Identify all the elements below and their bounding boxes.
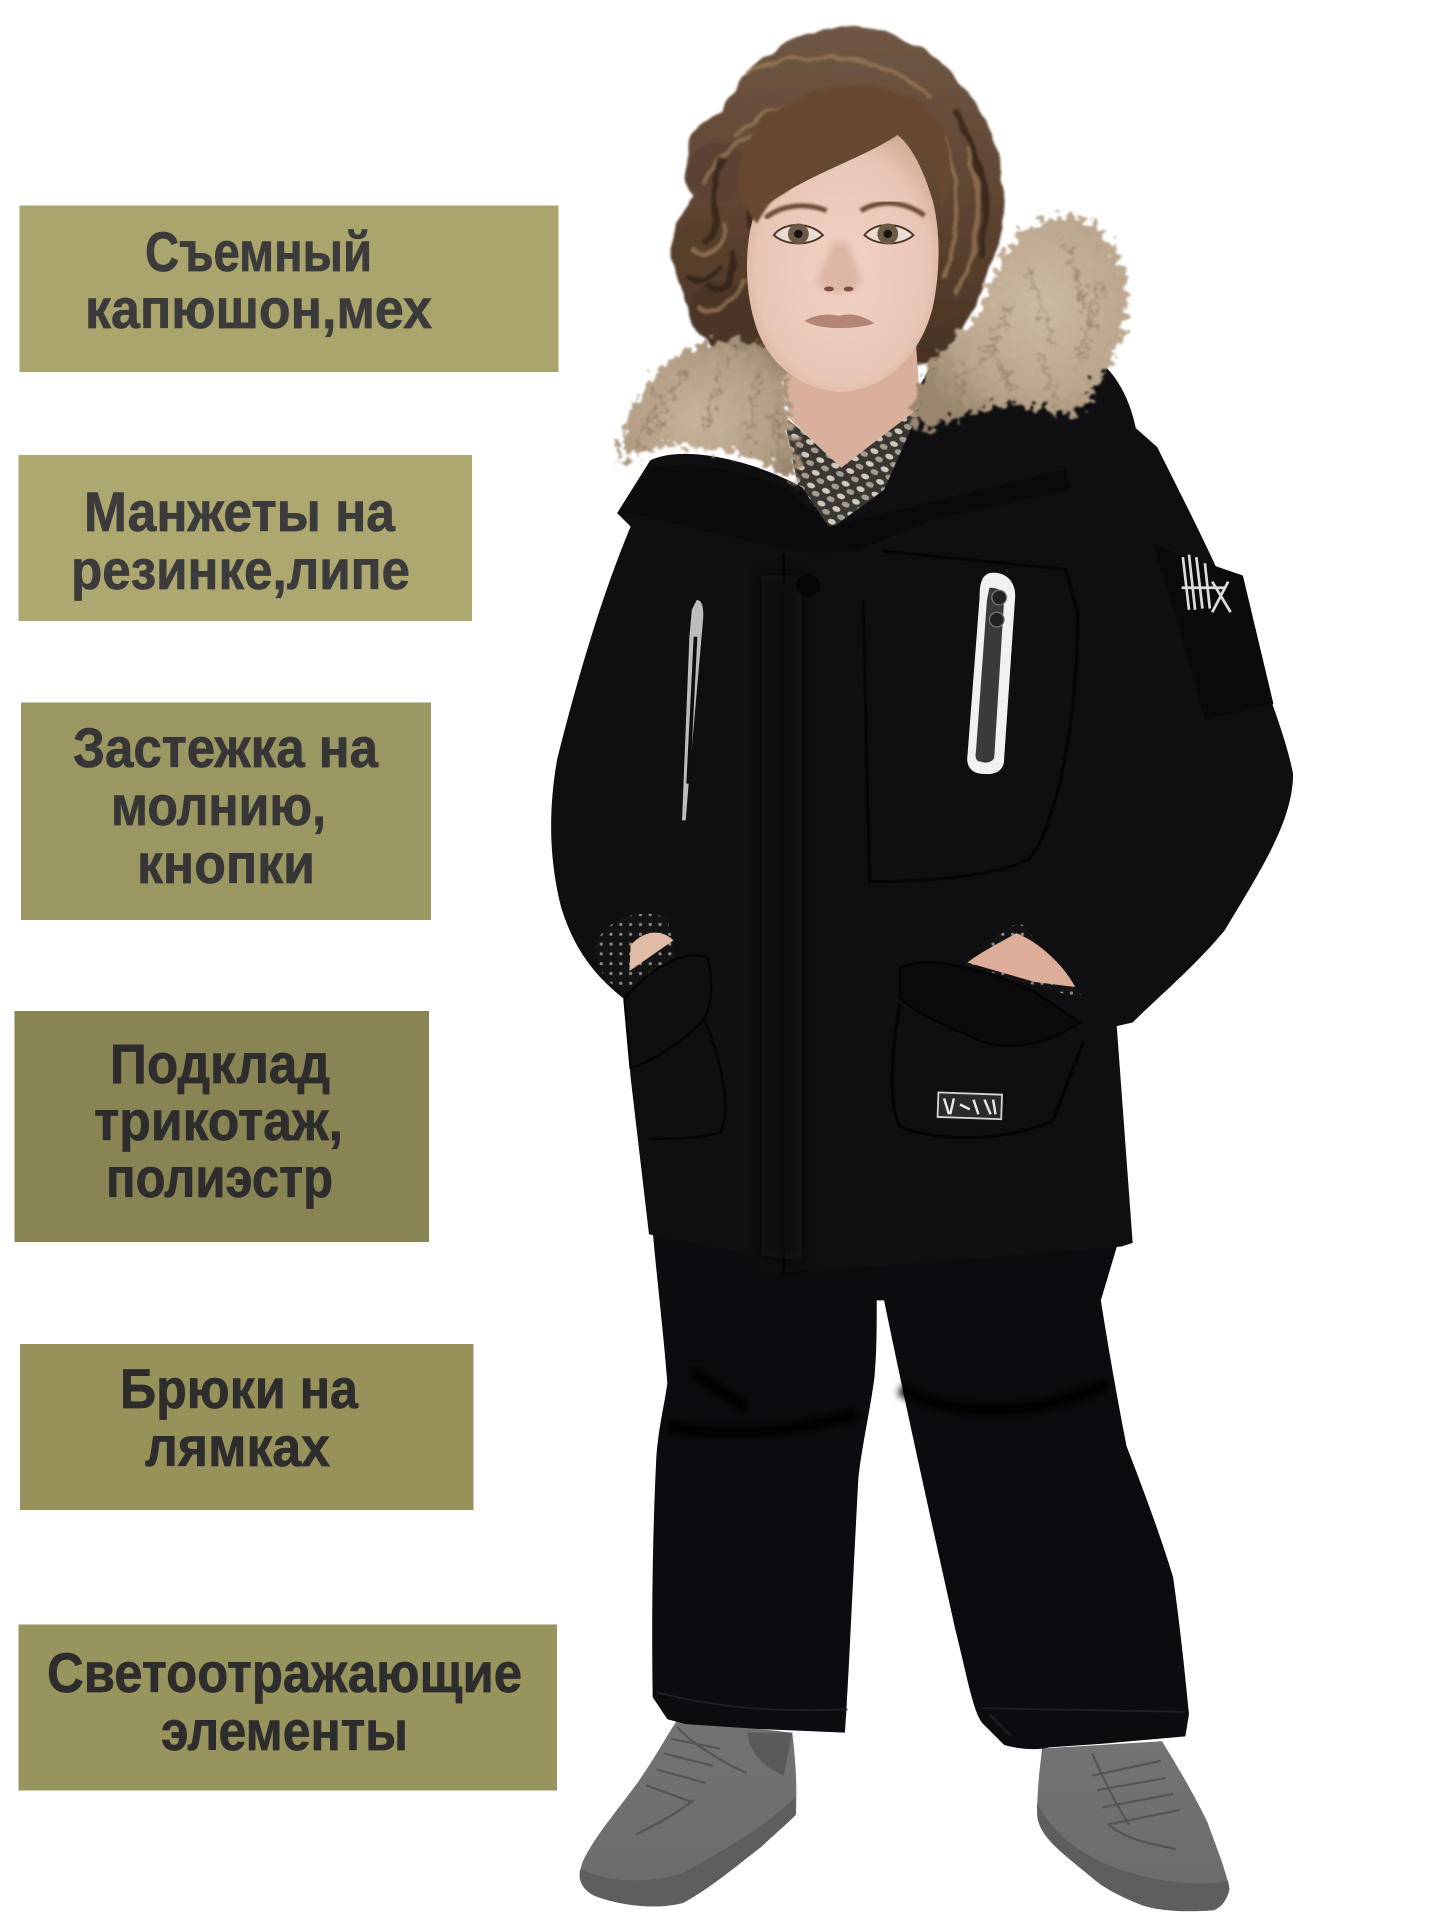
feature box: reflective elements (18, 1624, 557, 1790)
feature box: cuffs: Манжеты на (84, 480, 396, 543)
icon: right eye (864, 223, 913, 244)
feature box: trousers: Брюки на (120, 1357, 359, 1420)
icon: reflective left zip (682, 600, 703, 820)
icon: right hand and cuff (965, 924, 1084, 998)
hair fringe (738, 86, 951, 223)
icon: fur trim right (915, 216, 1126, 435)
face (747, 135, 939, 392)
hood back (857, 343, 1136, 490)
left pocket (624, 955, 725, 1139)
feature box: fastening: молнию, (111, 774, 326, 837)
feature box: fastening (21, 702, 431, 920)
feature box: trousers: лямках (145, 1415, 330, 1478)
neck (779, 343, 921, 468)
feature box: lining: полиэстр (106, 1146, 333, 1209)
feature box: detachable hood: Съемный (145, 220, 372, 283)
feature box: detachable hood: капюшон,мех (85, 277, 432, 340)
icon: left shoe (580, 1720, 796, 1906)
feature box: lining (14, 1011, 429, 1242)
icon: fur trim left (621, 339, 798, 484)
feature box: reflective elements: Светоотражающие (47, 1641, 522, 1704)
icon: left hand and cuff (596, 914, 676, 992)
icon: sleeve pocket with logo (1153, 545, 1273, 720)
feature box: reflective elements: элементы (161, 1699, 408, 1762)
panel: features list (14, 206, 558, 1790)
feature box: trousers (20, 1344, 474, 1510)
right pocket (900, 963, 1080, 1046)
hair (671, 26, 1004, 380)
feature box: cuffs (18, 455, 472, 621)
jacket (551, 416, 1293, 1273)
feature box: fastening: кнопки (137, 832, 315, 895)
feature box: detachable hood (20, 206, 558, 372)
feature box: lining: Подклад (110, 1032, 330, 1095)
icon: left eye (774, 223, 823, 244)
icon: reflective chest zip (967, 573, 1015, 774)
feature box: lining: трикотаж, (94, 1089, 343, 1152)
icon: snap button (796, 574, 820, 596)
trousers (652, 1231, 1189, 1749)
icon: pocket logo patch (938, 1092, 1002, 1119)
icon: right shoe (1037, 1741, 1229, 1911)
illustration: boy in winter suit (551, 26, 1293, 1911)
feature box: fastening: Застежка на (73, 716, 379, 779)
icon: patterned scarf (784, 407, 921, 529)
feature box: cuffs: резинке,липе (71, 538, 410, 601)
